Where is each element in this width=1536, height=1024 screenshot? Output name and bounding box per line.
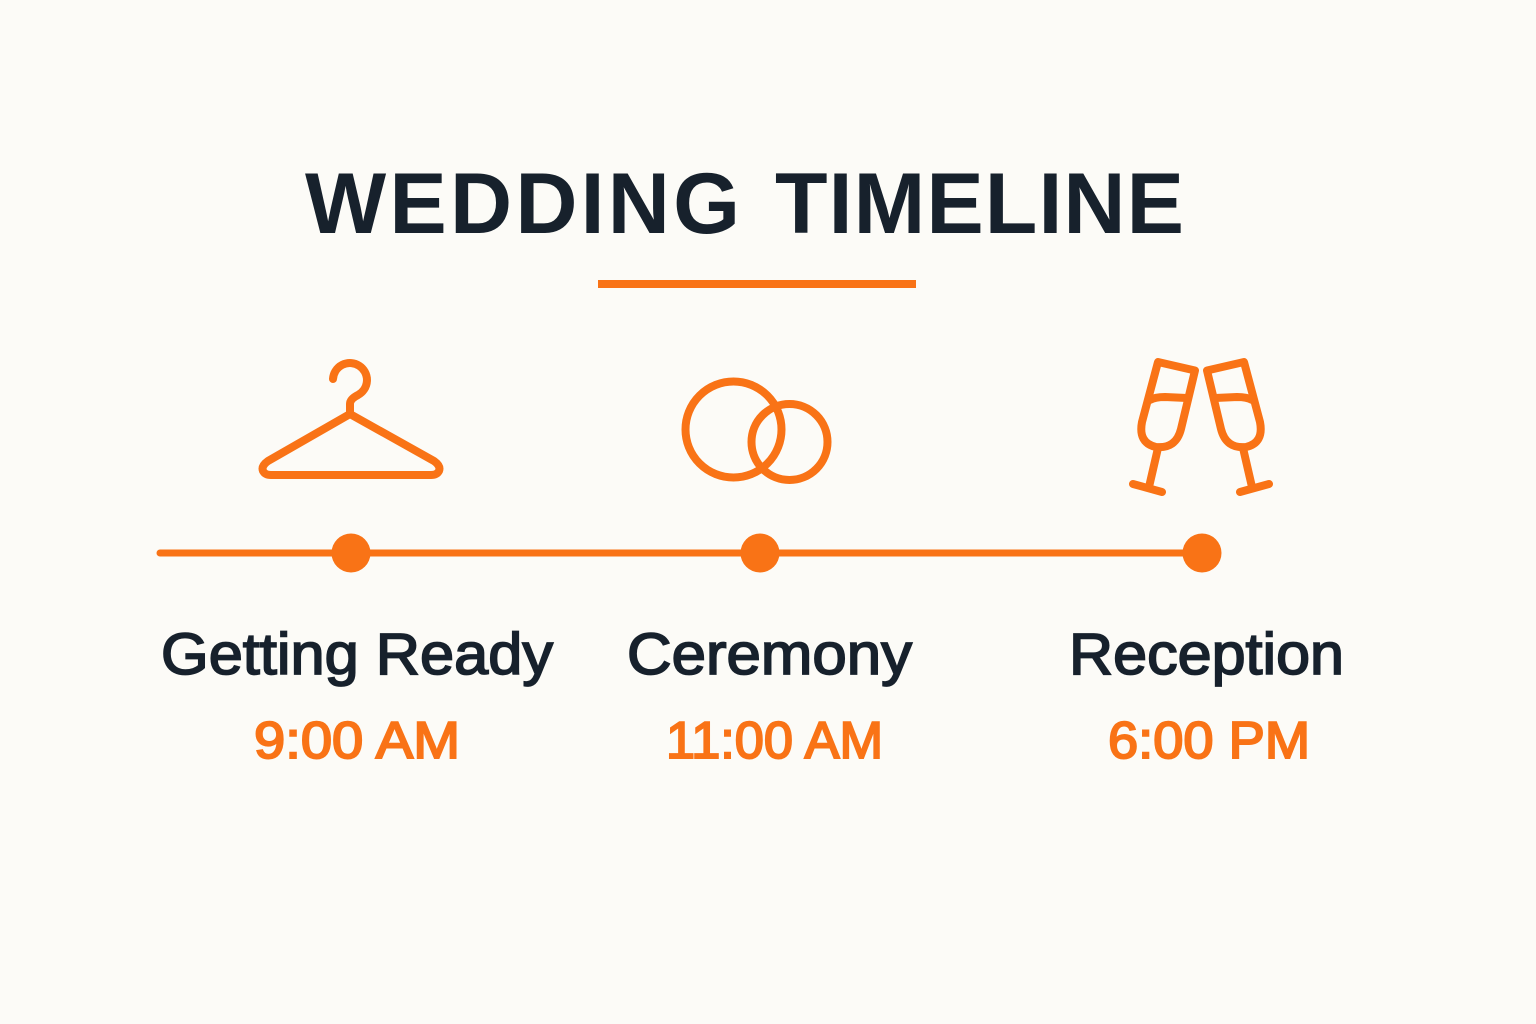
timeline line: [160, 550, 1200, 556]
label: ceremony: Ceremony: [627, 622, 912, 687]
label: reception: Reception: [1069, 622, 1344, 687]
time: 11:00 AM: 11:00 AM: [666, 712, 883, 770]
right glass: [1207, 362, 1269, 492]
label: getting ready: Getting Ready: [161, 622, 553, 687]
title underline: [598, 280, 916, 288]
title: WEDDING: [305, 156, 740, 252]
left glass: [1133, 362, 1195, 492]
time: 6:00 PM: 6:00 PM: [1108, 712, 1310, 770]
title: [305, 156, 1184, 252]
icon: clothes hanger: [263, 363, 439, 475]
time: 9:00 AM: 9:00 AM: [254, 712, 460, 770]
timeline marker: getting ready: [332, 534, 370, 572]
icon: champagne glasses: [1133, 362, 1269, 492]
timeline marker: reception: [1182, 534, 1222, 572]
icon: wedding rings: [686, 382, 828, 480]
timeline marker: ceremony: [740, 534, 780, 572]
title: TIMELINE: [775, 156, 1184, 252]
